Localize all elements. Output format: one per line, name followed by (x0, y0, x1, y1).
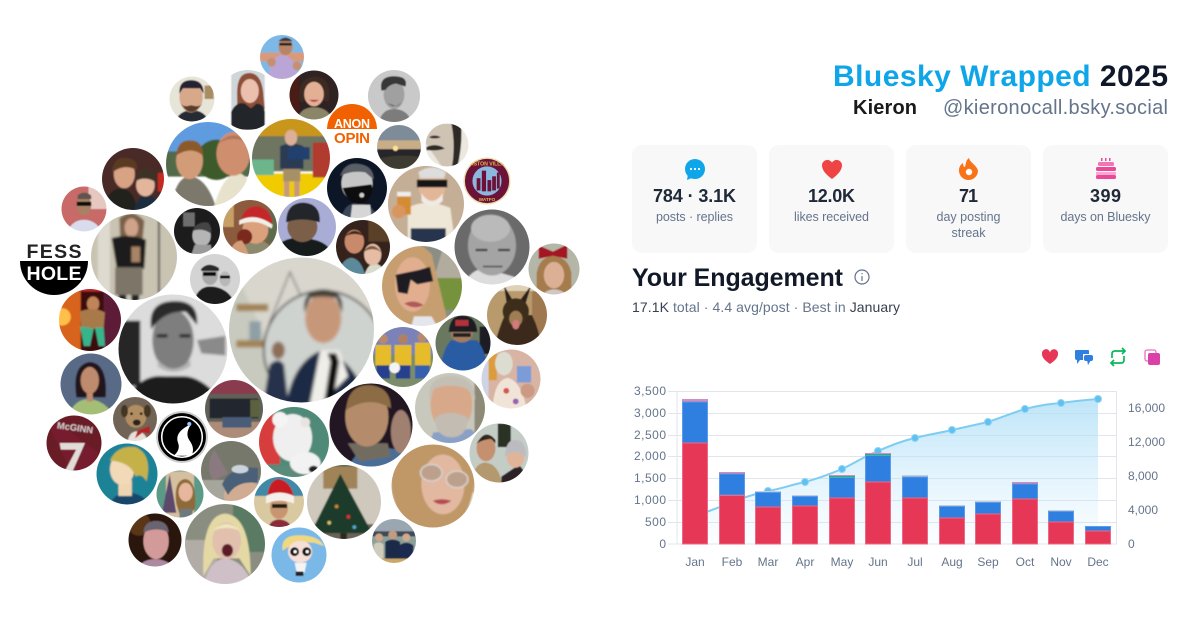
label: likes received: likes received (794, 210, 869, 224)
icon: heart (822, 160, 842, 179)
avatar: young blond man (330, 384, 412, 466)
icon: legend likes (1042, 349, 1058, 364)
avatar: woman with red bow (523, 238, 585, 300)
left axis labels: 2,500 (634, 428, 666, 442)
month labels: Jan (685, 555, 705, 569)
bar: likes (682, 443, 1110, 544)
avatar: anon opin logo: ANON (334, 117, 370, 131)
stat: days: 399 (1090, 186, 1121, 206)
avatar: man in dark room (128, 514, 182, 566)
right axis labels: 4,000 (1128, 503, 1158, 517)
month labels: Oct (1016, 555, 1035, 569)
bar: green segments (829, 454, 891, 478)
cumulative area (695, 399, 1098, 544)
avatar: stitch hat selfie (201, 441, 261, 501)
bar: top segments (682, 399, 1038, 484)
panel: days on bluesky (1043, 145, 1168, 253)
stat: streak: 71 (959, 186, 978, 206)
avatar: black and white man portrait (118, 294, 228, 404)
right axis labels: 8,000 (1128, 469, 1158, 483)
avatar: cyclist with sunglasses (62, 186, 106, 232)
engagement summary: 17.1K total · 4.4 avg/post · Best in January (632, 299, 900, 315)
left axis labels: 0 (659, 537, 666, 551)
avatar: anon opin logo (327, 104, 377, 147)
avatar: woman with phone selfie (476, 344, 546, 414)
chart legend icons (1042, 348, 1160, 366)
right axis labels: 0 (1128, 537, 1135, 551)
month labels: Dec (1087, 555, 1109, 569)
avatar: woman with red hair (230, 70, 266, 130)
icon: legend reposts (1111, 348, 1125, 366)
avatar: tall woman in mirror (91, 214, 177, 300)
cumulative markers (764, 396, 1102, 494)
left axis labels: 3,000 (634, 406, 666, 420)
avatar: man in dark suit (229, 258, 374, 402)
avatar: three people on pier (368, 515, 420, 567)
user name: Kieron (853, 97, 917, 119)
icon: legend replies (1075, 350, 1093, 365)
avatar bubble cluster (20, 31, 585, 592)
icon: legend quotes (1145, 350, 1160, 365)
avatar: smiling couple (336, 220, 390, 274)
avatar: powerpuff girl cartoon (272, 528, 326, 582)
month labels: Jul (907, 555, 923, 569)
left axis labels: 2,000 (634, 449, 666, 463)
avatar: couple at match (102, 148, 164, 210)
avatar: red football shirt number seven (46, 416, 102, 470)
avatar: woman by christmas tree (156, 470, 204, 518)
left axis labels: 1,500 (634, 471, 666, 485)
label: day posting streak: streak (952, 226, 986, 240)
bar: neutral tops (755, 475, 1074, 512)
avatar: performer on stage (59, 289, 121, 351)
avatar: christmas tree (307, 465, 381, 539)
avatar: bald man (447, 202, 537, 292)
avatar: black and white drinker (174, 208, 220, 254)
icon: info (855, 270, 869, 284)
avatar: small dog with bow tie (113, 397, 157, 441)
title: Bluesky Wrapped 2025 (833, 60, 1168, 93)
avatar: anon opin logo: OPIN (334, 130, 370, 147)
panel: likes (769, 145, 894, 253)
avatar: black and white couple (190, 254, 240, 304)
label: day posting streak: day posting (936, 210, 1001, 224)
avatar: aston villa badge: WATFO (479, 197, 496, 202)
avatar: fess hole logo: HOLE (26, 263, 82, 285)
avatar: man with santa hat and sunglasses (254, 477, 304, 527)
left axis labels: 1,000 (634, 493, 666, 507)
avatar: man on holiday (260, 35, 304, 79)
left axis labels (634, 384, 666, 551)
panel: streak (906, 145, 1031, 253)
month labels: Apr (796, 555, 814, 569)
avatar: curly haired woman (290, 70, 338, 120)
avatar: polar bear toy (259, 407, 329, 477)
avatar: cartoon man with beer (388, 166, 464, 242)
avatar: fess hole logo (20, 241, 88, 295)
icon: chat bubble (685, 159, 705, 180)
chart: monthly engagement (634, 384, 1165, 569)
avatar: red football shirt number seven: McGINN (56, 420, 94, 435)
avatar: young man and older woman (464, 418, 534, 488)
avatar: woman with dark hair (60, 354, 122, 414)
avatar: man holding box in lego store (252, 119, 330, 197)
stat: likes: 12.0K (808, 186, 855, 206)
avatar: man in beanie (278, 198, 336, 256)
avatar: woman with blonde sunglasses (374, 238, 470, 334)
gridlines (668, 391, 1117, 544)
left axis labels: 3,500 (634, 384, 666, 398)
label: days on bluesky: days on Bluesky (1060, 210, 1151, 224)
avatar: three footballers in yellow (367, 321, 439, 393)
user handle: @kieronocall.bsky.social (943, 97, 1168, 119)
icon: cake (1096, 158, 1116, 179)
month labels: Nov (1050, 555, 1072, 569)
avatar: blond cartoon (96, 444, 158, 504)
month labels: Mar (758, 555, 778, 569)
stacked bars (682, 399, 1110, 544)
month labels: Sep (977, 555, 999, 569)
right axis labels: 16,000 (1128, 401, 1165, 415)
avatar: blonde woman screaming (185, 504, 265, 584)
avatar: bearded man (170, 76, 214, 122)
heading: your engagement: Your Engagement (632, 264, 844, 292)
avatar: profile man (426, 124, 468, 166)
avatar: aston villa badge: ASTON VILLA (470, 161, 504, 167)
right axis labels (1128, 401, 1165, 551)
avatar: grey portrait (368, 70, 420, 122)
avatar: aston villa badge (464, 158, 510, 204)
avatar: sunset (377, 125, 421, 169)
bar: replies (682, 402, 1110, 531)
stat: posts replies: 784 · 3.1K (653, 186, 736, 206)
label: posts replies: posts · replies (656, 210, 733, 224)
panel: posts and replies (632, 145, 757, 253)
avatar: fess hole logo: FESS (26, 241, 82, 263)
avatar: man in face mask (327, 158, 387, 218)
avatar: man in blue coat (430, 310, 496, 376)
month labels: Feb (722, 555, 743, 569)
avatar: two men selfie (166, 122, 250, 206)
avatar: road logo (156, 411, 208, 463)
month labels: Aug (941, 555, 963, 569)
left axis labels: 500 (645, 515, 666, 529)
avatar: man with santa hat (223, 200, 277, 254)
avatar: german shepherd (481, 279, 553, 351)
right axis labels: 12,000 (1128, 435, 1165, 449)
month labels: May (831, 555, 853, 569)
avatar: group outside villa park (205, 380, 263, 438)
avatar: blonde woman in glasses (392, 444, 474, 528)
month labels (685, 555, 1109, 569)
avatar: grey haired man (408, 366, 492, 450)
month labels: Jun (868, 555, 888, 569)
cumulative line (695, 399, 1098, 516)
icon: flame (959, 158, 978, 180)
